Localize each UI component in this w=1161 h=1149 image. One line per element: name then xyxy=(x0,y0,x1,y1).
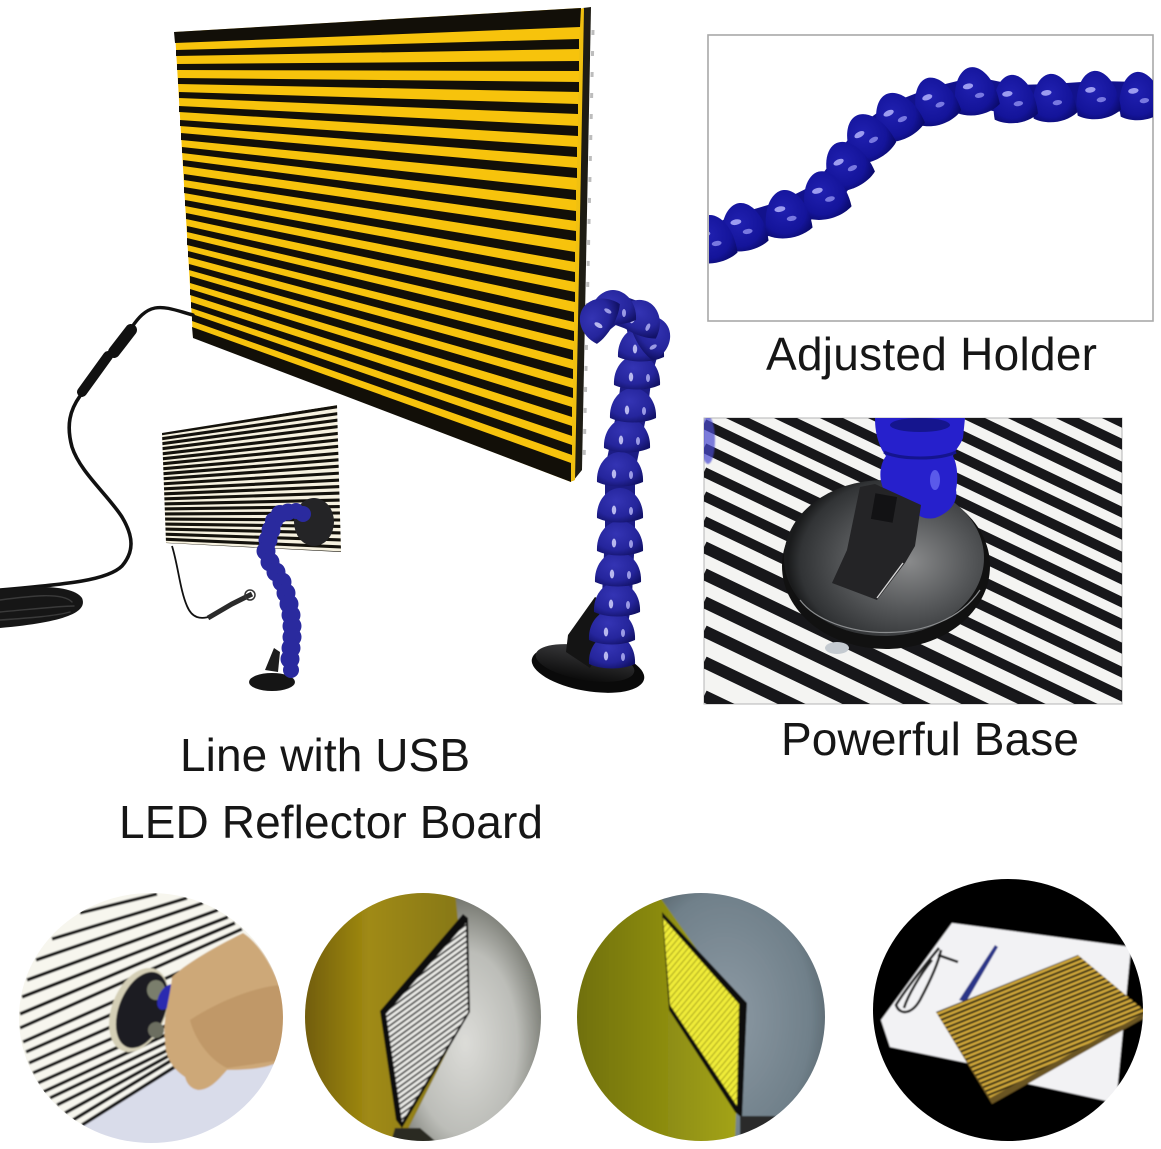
board black edge xyxy=(380,914,470,1128)
small flexible arm xyxy=(256,503,311,668)
caption: Line with USB LED Reflector Board: Line with USB xyxy=(180,729,470,781)
board black edge xyxy=(662,912,747,1118)
right slate wall xyxy=(660,893,825,1136)
gold striped board xyxy=(936,1012,1143,1105)
circle photo: yellow board lit against wall xyxy=(570,890,830,1145)
cable coil xyxy=(0,587,83,628)
panel: small white board with holder xyxy=(160,405,342,691)
cable coil xyxy=(896,948,958,1012)
adjusted holder beads xyxy=(709,67,1153,264)
caption: Line with USB LED Reflector Board xyxy=(119,729,543,848)
small base xyxy=(249,673,295,691)
diagonal stripes xyxy=(704,418,1122,704)
panel: flexible arm with suction base xyxy=(528,289,679,701)
board white face xyxy=(386,923,468,1122)
panel: powerful base photo xyxy=(704,418,1122,704)
heading: Adjusted Holder: Adjusted Holder xyxy=(766,328,1097,380)
black stripes xyxy=(174,8,581,482)
arm beads xyxy=(571,289,679,668)
board yellow face xyxy=(663,918,739,1106)
blue stick xyxy=(959,945,998,1002)
suction clamp lever xyxy=(832,484,921,600)
cable with connector and coil xyxy=(0,308,193,628)
board right edge xyxy=(570,7,591,481)
suction cup xyxy=(782,480,990,654)
blue holder stem xyxy=(875,418,965,519)
suction cup xyxy=(108,967,168,1054)
yellow board face xyxy=(175,8,580,482)
small wire and plug xyxy=(172,546,212,618)
circle photo: hand pressing suction cup xyxy=(15,890,300,1145)
suction base xyxy=(528,597,648,701)
panel: main reflector board xyxy=(174,7,593,482)
small suction cup xyxy=(294,498,334,546)
board stripes xyxy=(20,894,242,1125)
white sheet xyxy=(881,923,1131,1103)
panel: adjusted holder photo xyxy=(685,35,1161,321)
heading: Powerful Base: Powerful Base xyxy=(781,713,1079,765)
circle photo: white board lit against wall xyxy=(300,890,545,1145)
hand xyxy=(164,933,285,1090)
caption: Line with USB LED Reflector Board: LED Reflector Board xyxy=(119,796,543,848)
right grey wall xyxy=(408,898,541,1140)
lower blue surface xyxy=(83,1064,274,1143)
circle photo: packaged board on black xyxy=(870,875,1150,1145)
small board stripes xyxy=(160,406,342,553)
blue holder xyxy=(156,984,172,1011)
